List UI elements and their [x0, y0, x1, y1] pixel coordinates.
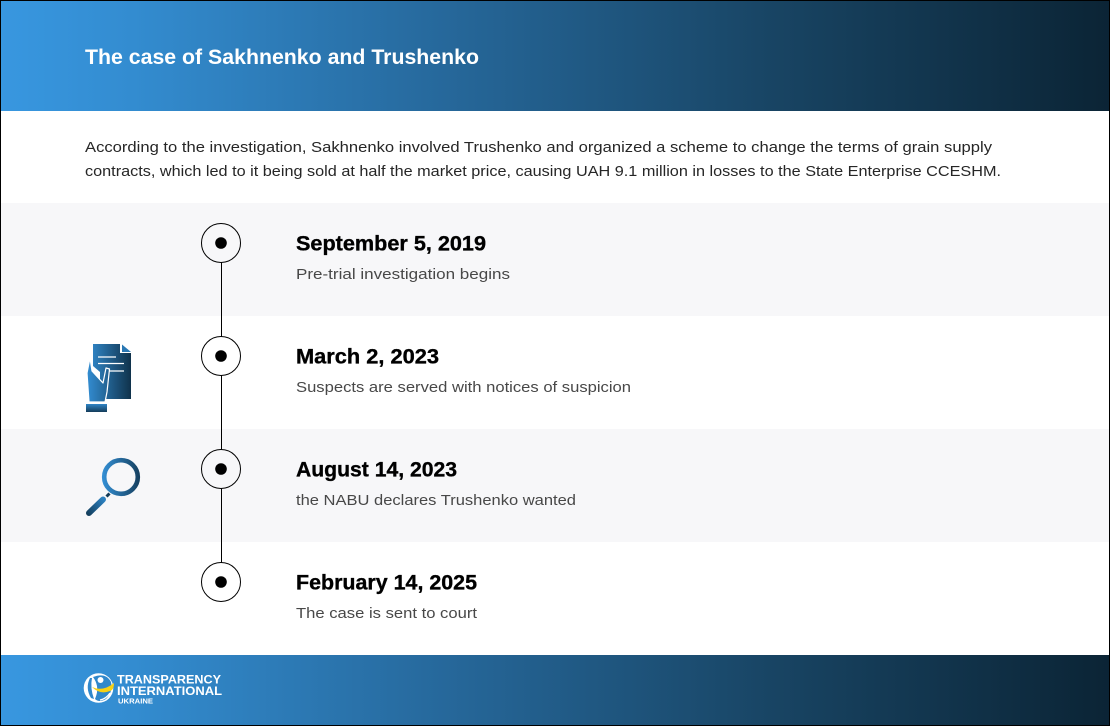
event 1: Pre-trial investigation begins: [296, 266, 510, 283]
intro paragraph: According to the investigation, Sakhnenko involved Trushenko and organized a scheme to change the terms of grain supply: [85, 139, 993, 156]
event 3: [296, 458, 576, 509]
footer band: [0, 655, 1110, 726]
event 3: August 14, 2023: [296, 458, 457, 482]
event 2: March 2, 2023: [296, 346, 439, 368]
timeline connector line: [221, 243, 222, 582]
row background: September 2019: [0, 203, 1110, 316]
timeline marker 4: [202, 562, 240, 602]
header band: [0, 0, 1110, 111]
row background: August 2023: [0, 429, 1110, 542]
event 2: Suspects are served with notices of suspicion: [296, 379, 631, 396]
logo: Transparency International Ukraine: TRANSPARENCY: [117, 672, 221, 686]
event 3: the NABU declares Trushenko wanted: [296, 492, 576, 509]
event 1: September 5, 2019: [296, 232, 486, 256]
timeline marker 2: [202, 336, 240, 376]
event 4: February 14, 2025: [296, 572, 477, 594]
logo: Transparency International Ukraine: [84, 672, 222, 706]
event 1: [296, 232, 510, 283]
event 2: [296, 346, 631, 396]
icon: magnifying glass: [89, 460, 138, 513]
timeline marker 1: [202, 224, 240, 262]
title: The case of Sakhnenko and Trushenko: [85, 46, 479, 69]
intro paragraph: contracts, which led to it being sold at half the market price, causing UAH 9.1 million in losses to the State Enterprise CCESHM.: [85, 163, 1001, 180]
event 4: [296, 572, 478, 622]
intro paragraph: [85, 139, 1001, 180]
timeline marker 3: [202, 450, 240, 488]
event 4: The case is sent to court: [296, 605, 478, 622]
icon: hand holding document: [86, 344, 131, 412]
logo: Transparency International Ukraine: UKRAINE: [118, 698, 153, 706]
logo: Transparency International Ukraine: INTERNATIONAL: [117, 684, 222, 698]
